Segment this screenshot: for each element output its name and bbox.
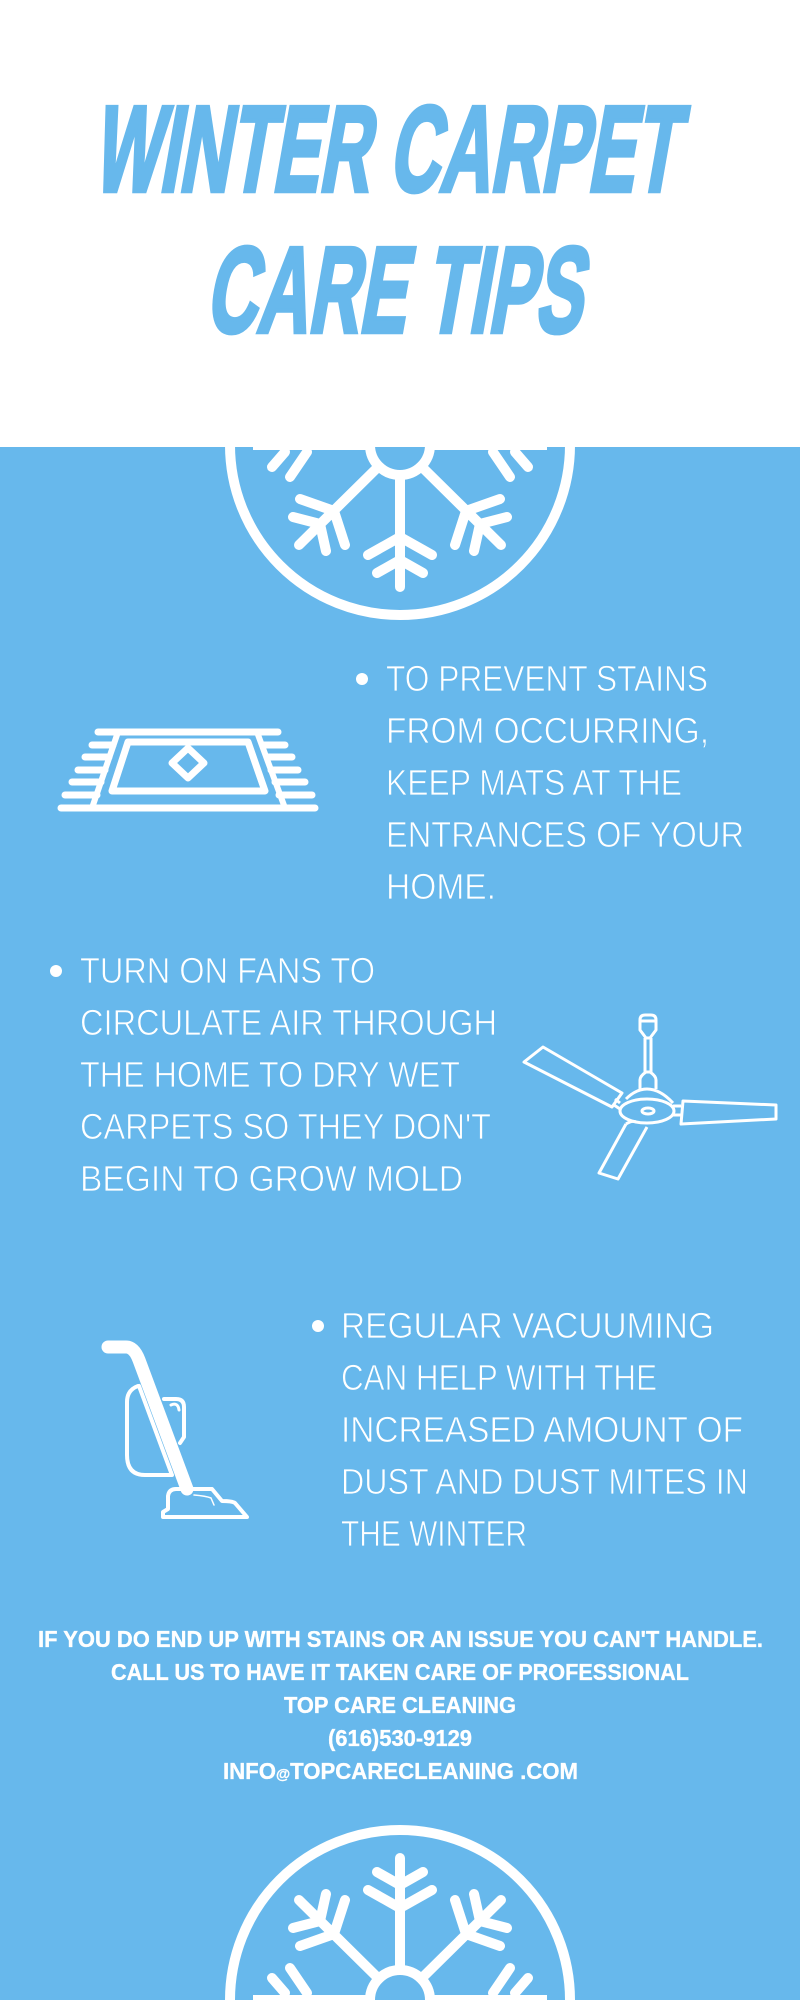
bullet tip: fans: BEGIN TO GROW MOLD	[80, 1158, 463, 1199]
call to action: (616)530-9129	[328, 1725, 472, 1751]
icon: bottom snowflake in circle	[230, 1830, 570, 2000]
bullet tip: vacuuming: INCREASED AMOUNT OF	[341, 1409, 743, 1450]
call to action: IF YOU DO END UP WITH STAINS OR AN ISSUE YOU CAN'T HANDLE.	[38, 1626, 763, 1652]
title panel	[0, 0, 800, 447]
bullet tip: fans: THE HOME TO DRY WET	[80, 1054, 460, 1095]
bullet tip: mats	[356, 658, 744, 907]
bullet tip: fans: CIRCULATE AIR THROUGH	[80, 1002, 497, 1043]
call to action: INFO@TOPCARECLEANING .COM	[223, 1758, 578, 1784]
call to action: TOP CARE CLEANING	[284, 1692, 516, 1718]
icon: vacuum cleaner	[108, 1347, 247, 1517]
bullet tip: mats: ENTRANCES OF YOUR	[386, 814, 744, 855]
bullet tip: vacuuming: REGULAR VACUUMING	[341, 1305, 714, 1346]
icon: rug	[61, 732, 315, 808]
bullet tip: mats: HOME.	[386, 866, 496, 907]
bullet tip: vacuuming: DUST AND DUST MITES IN	[341, 1461, 748, 1502]
bullet tip: mats: TO PREVENT STAINS	[386, 658, 708, 699]
bullet tip: mats: KEEP MATS AT THE	[386, 762, 682, 803]
bullet tip: vacuuming	[312, 1305, 748, 1554]
icon: ceiling fan	[524, 1015, 776, 1179]
bullet tip: mats: FROM OCCURRING,	[386, 710, 709, 751]
bullet tip: fans: TURN ON FANS TO	[80, 950, 375, 991]
bullet tip: fans	[50, 950, 497, 1199]
bullet tip: vacuuming: CAN HELP WITH THE	[341, 1357, 657, 1398]
bullet tip: fans: CARPETS SO THEY DON'T	[80, 1106, 491, 1147]
icon: top snowflake in circle	[230, 445, 570, 615]
bullet tip: vacuuming: THE WINTER	[341, 1513, 527, 1554]
call to action	[38, 1626, 763, 1784]
call to action: CALL US TO HAVE IT TAKEN CARE OF PROFESSIONAL	[111, 1659, 689, 1685]
title	[87, 82, 695, 359]
